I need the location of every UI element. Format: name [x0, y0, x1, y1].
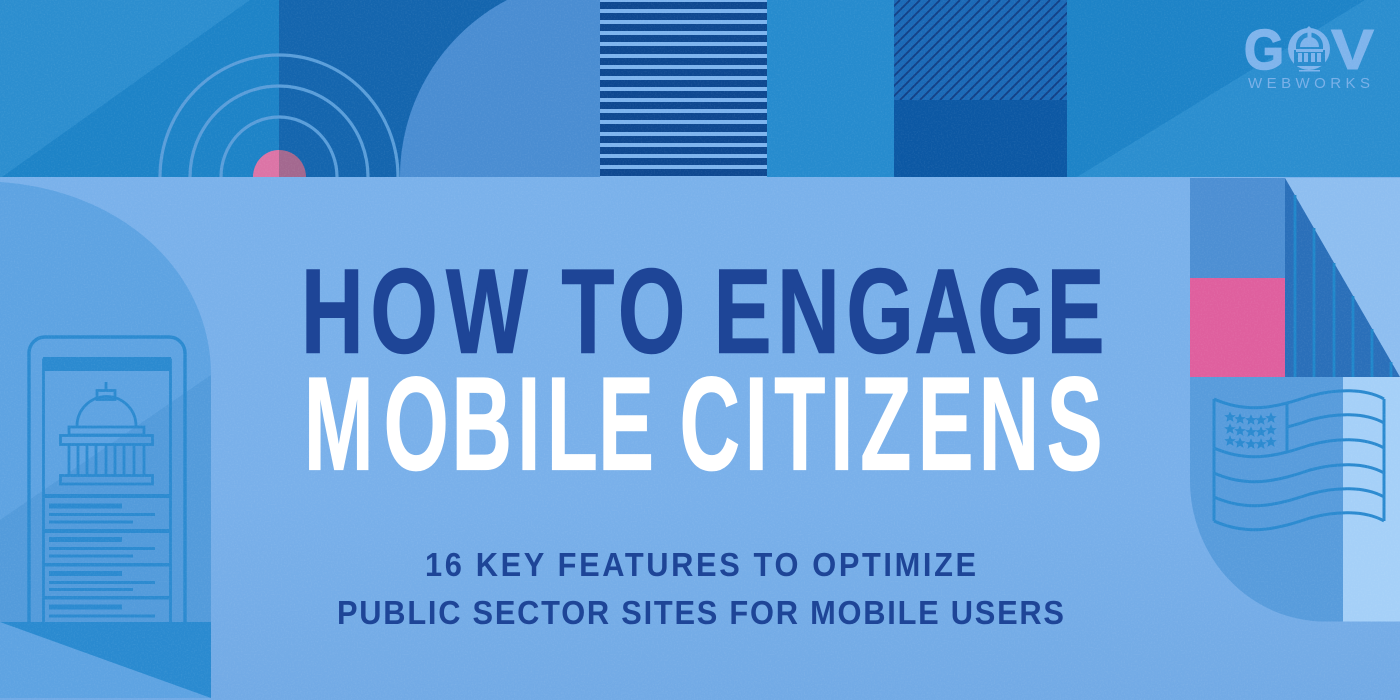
light triangle	[1285, 178, 1400, 377]
title: HOW TO ENGAGE	[301, 245, 1104, 379]
subtitle: PUBLIC SECTOR SITES FOR MOBILE USERS	[337, 594, 1064, 631]
icon: capitol in logo	[1294, 32, 1325, 72]
striped panel	[600, 0, 767, 177]
pale blue column	[1343, 377, 1400, 622]
panel: left phone arch	[0, 182, 211, 698]
icon: pink semicircle	[253, 150, 306, 177]
rounded flag panel	[1190, 377, 1343, 622]
icon: smartphone	[29, 337, 185, 622]
title: MOBILE CITIZENS	[304, 349, 1103, 498]
list rows on phone screen	[43, 494, 171, 618]
logo: Gov WebWorks: V	[1331, 18, 1374, 82]
icon: concentric signal rings	[160, 55, 398, 177]
top left light triangle	[0, 0, 250, 177]
pink square	[1190, 278, 1285, 377]
logo: Gov WebWorks	[1244, 18, 1374, 92]
dark blue block with arc	[279, 0, 519, 177]
subtitle	[337, 546, 1064, 631]
flag stars	[1224, 411, 1277, 449]
hatched panel	[894, 0, 1067, 177]
icon: waving flag	[1214, 391, 1384, 530]
panel: right geometric column	[1190, 178, 1400, 622]
light blue quarter circle	[400, 0, 600, 177]
dark striped triangle	[1285, 178, 1400, 377]
subtitle: 16 KEY FEATURES TO OPTIMIZE	[425, 546, 976, 583]
logo: Gov WebWorks: WEBWORKS	[1248, 75, 1370, 92]
top right light triangle	[1077, 0, 1400, 177]
panel: top banner	[0, 0, 1400, 177]
icon: capitol building	[60, 382, 152, 484]
bottom dark triangle	[0, 622, 211, 698]
plain blue column	[767, 0, 894, 177]
arch darker diagonal shade	[0, 375, 211, 622]
logo: Gov WebWorks: G	[1244, 18, 1284, 82]
title	[301, 245, 1104, 498]
